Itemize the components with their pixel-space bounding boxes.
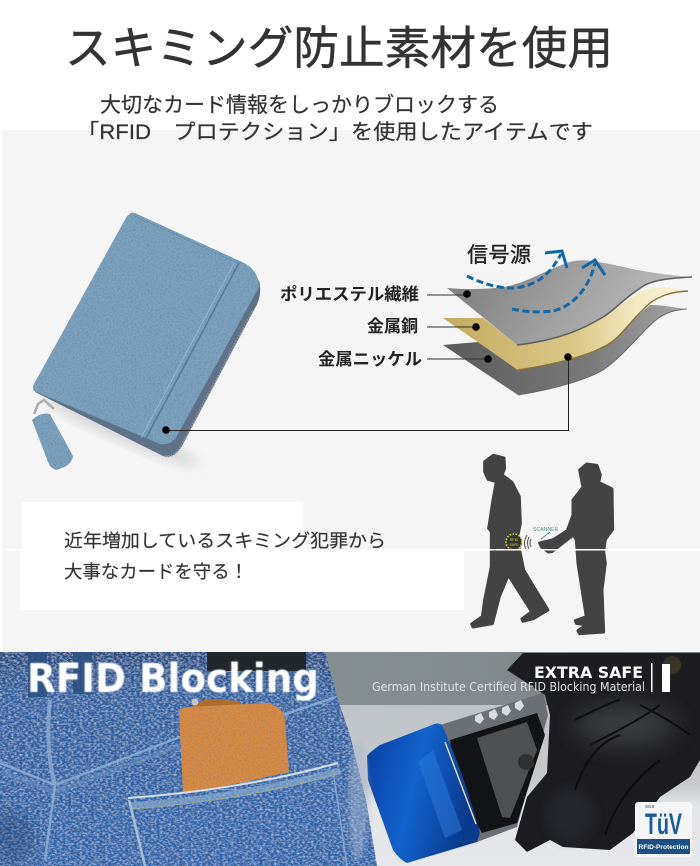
photo backdrop — [0, 652, 700, 866]
scan waves — [524, 535, 531, 551]
title: スキミング防止素材を使用 — [65, 23, 613, 74]
denim shading — [0, 812, 34, 864]
body text: skimming crime: 大事なカードを守る！ — [64, 561, 248, 582]
extra safe text: EXTRA SAFE — [534, 663, 643, 682]
black leather glove — [507, 653, 700, 852]
jeans pocket — [128, 763, 350, 866]
label: copper metal — [367, 316, 480, 336]
extra safe text: German Institute Certified RFID Blocking Material — [372, 679, 645, 694]
person walking — [472, 455, 548, 627]
TUV badge: TüV — [645, 808, 682, 841]
label: copper metal: 金属銅 — [367, 316, 418, 336]
wallet photo: blue leather wallet — [32, 213, 260, 474]
wallet zipper side — [35, 280, 260, 457]
signal arrows — [467, 251, 605, 312]
heading: RFID Blocking: RFID Blocking — [27, 656, 319, 702]
leader line from wallet to layers — [162, 353, 572, 434]
white text boxes — [20, 502, 464, 610]
scanner label: SCANNER — [533, 527, 559, 533]
subtitle text block: 大切なカード情報をしっかりブロックする — [100, 94, 499, 117]
orange wallet — [179, 698, 289, 795]
wallet front face — [33, 213, 259, 444]
denim seams — [0, 670, 336, 860]
bottom photo — [0, 652, 700, 866]
RFID safe badge — [506, 534, 522, 550]
TUV badge: SGS — [645, 804, 655, 809]
body text: skimming crime — [64, 530, 386, 582]
wallet zip pull tab — [32, 400, 73, 470]
subtitle text block — [77, 94, 593, 144]
subtitle text block: 「RFID プロテクション」を使用したアイテムです — [77, 121, 593, 144]
person scanning — [540, 464, 613, 634]
TUV badge — [635, 802, 692, 857]
label: signal source: 信号源 — [467, 244, 531, 267]
skimming scene: silhouettes — [472, 455, 613, 634]
denim label patch — [207, 652, 306, 671]
material layers diagram — [280, 244, 692, 395]
label: polyester fibre: ポリエステル繊維 — [280, 284, 419, 304]
extra safe text — [372, 663, 670, 694]
body text: skimming crime: 近年増加しているスキミング犯罪から — [64, 530, 386, 551]
label: nickel metal — [318, 349, 492, 369]
label: polyester fibre — [280, 284, 471, 304]
label: nickel metal: 金属ニッケル — [318, 349, 422, 369]
layer: polyester fibre — [447, 260, 692, 345]
grey band behind heading — [320, 652, 700, 705]
denim jeans — [0, 652, 377, 866]
white horizontal strip — [0, 549, 700, 550]
background panel — [2, 130, 700, 652]
layer: nickel — [443, 305, 687, 395]
payment terminal — [367, 693, 548, 863]
layer: copper — [443, 287, 688, 370]
TUV badge: RFID-Protection — [638, 845, 689, 851]
RFID safe badge: RFID — [510, 538, 519, 542]
RFID safe badge: SAFE — [509, 543, 519, 547]
